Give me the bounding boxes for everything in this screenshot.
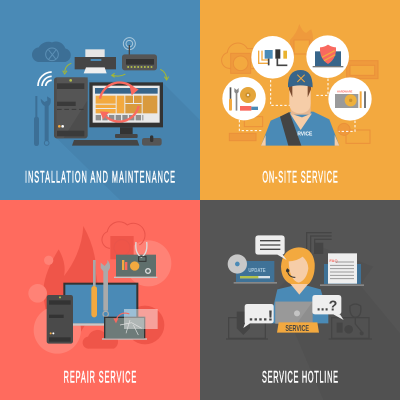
heading: ON-SITE SERVICE [262, 167, 338, 186]
icon: printer [75, 49, 116, 73]
icon: monitor [89, 82, 163, 138]
icon: wrench [41, 96, 51, 145]
technician: RVICE [297, 132, 313, 138]
background line icons [222, 24, 378, 143]
laptop outline with stethoscope [329, 304, 372, 340]
icon: screwdriver [34, 96, 39, 146]
icon: refresh arrows [100, 83, 139, 122]
panel: repair service [0, 200, 200, 400]
circle: hardware [328, 77, 372, 121]
cloud and fan line icon [102, 222, 145, 259]
speech bubble: question: ...? [317, 299, 337, 315]
dark circle [126, 306, 164, 344]
arrows: yellow connectors [63, 63, 169, 80]
chip outline icon [307, 233, 332, 253]
laptop with update [234, 261, 277, 284]
icon: tower [47, 295, 73, 344]
circle: security shield laptop [306, 35, 349, 78]
icon: computer tower [54, 77, 88, 138]
laptop outline with shield [226, 312, 268, 340]
panel: on-site service [200, 0, 400, 200]
speech bubble: exclamation: ....! [249, 309, 273, 325]
long shadow [55, 80, 200, 200]
heading: SERVICE HOTLINE [262, 367, 338, 386]
icon: router [122, 38, 157, 70]
operator [271, 247, 328, 323]
long shadow [277, 247, 400, 400]
flame [43, 226, 100, 333]
panel: service hotline [200, 200, 400, 400]
laptop with FAQ: FAQ [329, 258, 338, 263]
icon: mouse [142, 135, 162, 146]
speech bubble: question [312, 295, 344, 320]
speech bubble: exclamation [243, 304, 274, 328]
circle: tools and disc [222, 77, 266, 120]
icon: wrench [101, 260, 110, 317]
laptop with charts and stethoscope [114, 242, 157, 278]
technician [261, 70, 339, 146]
icon: screwdriver [91, 260, 97, 317]
broken laptop [102, 309, 158, 340]
laptop front [275, 302, 313, 324]
icon: keyboard [72, 140, 139, 146]
heading: REPAIR SERVICE [64, 367, 137, 386]
laptop with update: UPDATE [248, 268, 266, 274]
circle: hardware: HARDWARE [337, 90, 352, 94]
icon: cloud [32, 42, 71, 62]
icon: wifi [38, 72, 52, 86]
circle: cables [251, 36, 294, 79]
laptop main [63, 283, 138, 326]
dashed connectors [239, 79, 355, 131]
icon: disc [228, 254, 247, 274]
red cloud [83, 330, 118, 349]
panel: installation and maintenance [0, 0, 200, 200]
service label: SERVICE [285, 323, 309, 333]
background circles [28, 240, 171, 354]
laptop with FAQ [320, 253, 364, 286]
heading: INSTALLATION AND MAINTENANCE [25, 167, 175, 186]
speech bubble: lines [255, 235, 287, 260]
